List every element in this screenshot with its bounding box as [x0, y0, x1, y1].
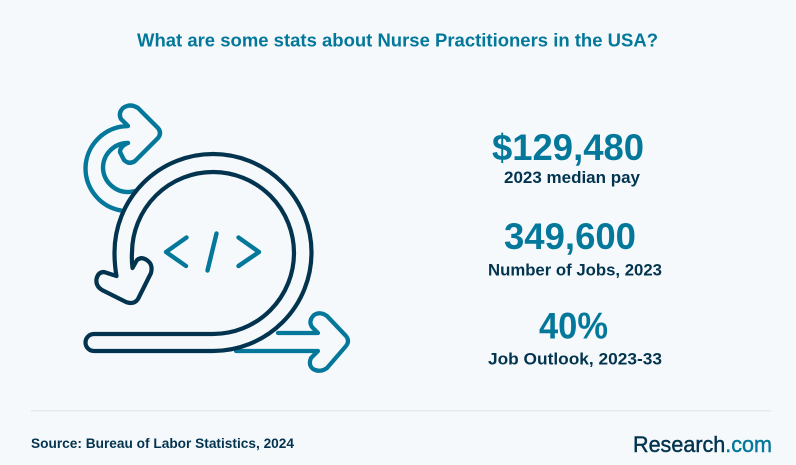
stat: median pay	[492, 127, 644, 187]
stat: job outlook	[488, 306, 662, 368]
icon: code brackets and slash	[166, 234, 259, 270]
icon: agile sprint loop	[85, 106, 348, 371]
stat value: number of jobs: 349,600	[504, 216, 636, 257]
icon: bottom teal exit arrow	[236, 313, 348, 371]
stat value: job outlook: 40%	[539, 306, 608, 346]
logo: Research.com: Research.com	[633, 432, 772, 457]
stat label: number of jobs: Number of Jobs, 2023	[488, 262, 662, 280]
stat value: median pay: $129,480	[492, 127, 644, 168]
title: What are some stats about Nurse Practitioners in the USA?	[137, 30, 658, 50]
stat label: job outlook: Job Outlook, 2023-33	[488, 350, 662, 368]
icon: dark circular arrow band	[86, 154, 312, 351]
stat: number of jobs	[488, 216, 662, 280]
icon: top teal loop arrow	[85, 106, 160, 213]
stat label: median pay: 2023 median pay	[504, 169, 641, 187]
source note: Source: Bureau of Labor Statistics, 2024	[31, 435, 294, 451]
